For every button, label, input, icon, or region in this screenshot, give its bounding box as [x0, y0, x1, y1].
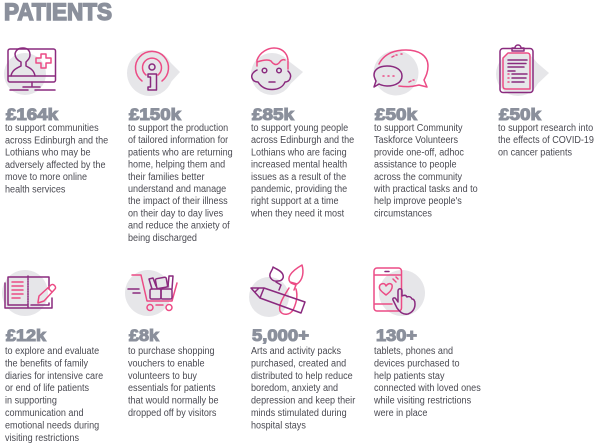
description: depression and keep their: [251, 394, 355, 406]
description: [128, 122, 233, 243]
description: volunteers to buy: [128, 370, 197, 381]
amount: £50k: [375, 105, 418, 124]
description: [251, 345, 355, 430]
description: move to more online: [5, 171, 87, 182]
description: [373, 345, 481, 418]
description: Arts and activity packs: [251, 345, 341, 356]
panel: family diaries: [2, 270, 103, 443]
description: issues as a result of the: [251, 171, 346, 182]
description: purchased, created and: [251, 357, 346, 368]
description: [128, 345, 219, 418]
icon: information signal: [127, 50, 180, 96]
icon: monitor with doctor: [4, 48, 56, 95]
panel: young people mental health: [250, 48, 354, 218]
description: across Edinburgh and the: [251, 134, 354, 145]
description: [5, 345, 103, 443]
description: Lothians who may be: [5, 146, 91, 158]
icon: shopping trolley: [125, 270, 177, 316]
amount: 5,000+: [252, 326, 309, 345]
panel: community taskforce volunteers: [373, 50, 478, 218]
amount: £164k: [6, 105, 59, 124]
description: home, helping them and: [128, 158, 225, 170]
panel: COVID-19 research: [496, 45, 594, 157]
icon: child face: [251, 48, 303, 95]
description: their families better: [128, 171, 204, 182]
icon: diary and pencil: [2, 270, 56, 316]
panel: tablets and phones: [373, 268, 481, 418]
description: emotional needs during: [5, 419, 99, 430]
description: while visiting restrictions: [373, 394, 471, 406]
description: tablets, phones and: [374, 345, 453, 356]
description: the effects of COVID-19: [498, 134, 594, 145]
description: diaries for intensive care: [5, 370, 103, 381]
icon: phone with heart: [374, 268, 425, 316]
description: being discharged: [128, 232, 197, 243]
description: with practical tasks and to: [373, 183, 478, 194]
description: [373, 122, 478, 218]
description: that would normally be: [128, 394, 219, 406]
amount: £50k: [499, 105, 542, 124]
panel: arts and activity packs: [249, 265, 355, 430]
description: vouchers to enable: [128, 357, 205, 368]
description: circumstances: [374, 207, 432, 218]
description: to support young people: [251, 122, 348, 133]
description: help improve people's: [374, 195, 462, 206]
description: when they need it most: [250, 207, 345, 218]
description: provide one-off, adhoc: [374, 146, 464, 157]
description: to support communities: [5, 122, 99, 133]
description: to purchase shopping: [128, 345, 215, 356]
amount: £12k: [6, 326, 47, 345]
description: essentials for patients: [128, 382, 216, 393]
description: distributed to help reduce: [251, 370, 353, 381]
description: Taskforce Volunteers: [374, 134, 458, 145]
description: dropped off by visitors: [128, 407, 217, 418]
description: devices purchased to: [374, 357, 460, 368]
icon: pencil and paintbrushes: [249, 265, 305, 317]
description: to support Community: [374, 122, 463, 133]
description: help patients stay: [374, 370, 445, 381]
description: pandemic, providing the: [251, 183, 347, 194]
description: hospital stays: [251, 419, 306, 430]
panel: tailored information: [127, 50, 233, 243]
description: patients who are returning: [128, 146, 233, 157]
amount: £8k: [129, 326, 160, 345]
panel: online health services: [4, 48, 108, 194]
description: across the community: [374, 171, 462, 182]
description: in supporting: [5, 394, 57, 406]
description: communication and: [5, 407, 84, 418]
description: of tailored information for: [128, 134, 228, 145]
amount: £150k: [129, 105, 182, 124]
description: were in place: [373, 407, 427, 418]
description: increased mental health: [251, 158, 347, 170]
icon: speech bubbles: [374, 50, 428, 96]
description: adversely affected by the: [5, 159, 106, 170]
description: health services: [5, 183, 66, 194]
description: assistance to people: [374, 158, 457, 170]
icon: clipboard: [496, 45, 549, 96]
description: [498, 122, 594, 157]
description: [250, 122, 354, 218]
description: to explore and evaluate: [5, 345, 99, 356]
description: the impact of their illness: [128, 195, 228, 206]
amount: £85k: [252, 105, 295, 124]
description: the benefits of family: [5, 357, 88, 368]
description: to support research into: [498, 122, 593, 133]
description: understand and manage: [128, 183, 226, 194]
panel: shopping vouchers: [125, 270, 219, 418]
description: on cancer patients: [498, 146, 572, 157]
description: and reduce the anxiety of: [128, 219, 230, 231]
description: to support the production: [128, 122, 228, 133]
description: or end of life patients: [5, 382, 89, 393]
amount: 130+: [376, 326, 417, 345]
description: visiting restrictions: [5, 432, 79, 443]
description: on their day to day lives: [128, 207, 223, 218]
description: Lothians who are facing: [251, 146, 347, 157]
description: right support at a time: [251, 195, 339, 206]
description: across Edinburgh and the: [5, 134, 108, 145]
description: [5, 122, 108, 194]
description: boredom, anxiety and: [251, 382, 338, 393]
description: minds stimulated during: [251, 407, 347, 418]
description: connected with loved ones: [374, 382, 481, 393]
